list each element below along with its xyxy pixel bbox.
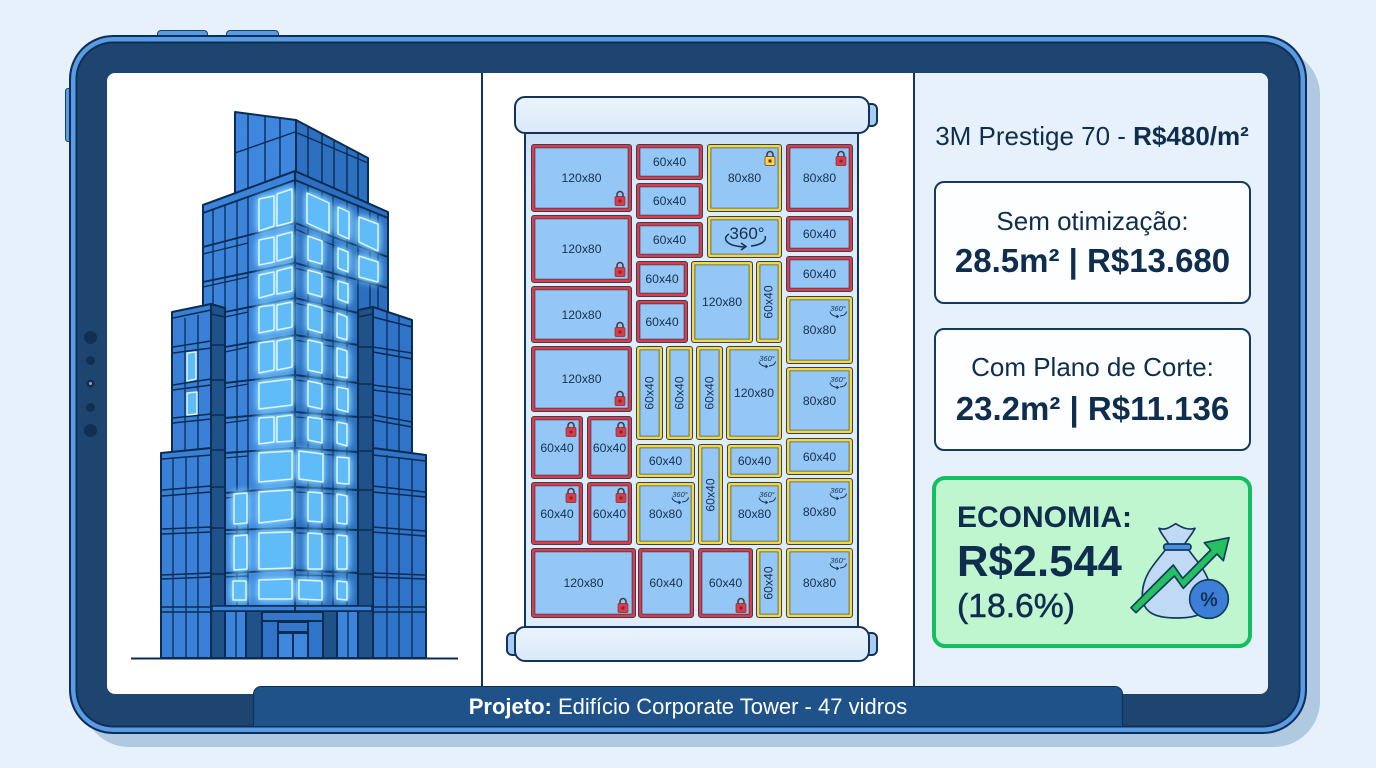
icon: lock (614, 262, 626, 277)
cell: 120x80 red (531, 215, 632, 283)
cell: vertical 60x40 yellow: 60x40 (762, 566, 776, 600)
cell: vertical 60x40 yellow: 60x40 (642, 376, 656, 410)
cell: 120x80 red: 120x80 (562, 242, 601, 256)
cell: vertical 60x40 yellow (756, 548, 782, 618)
cell: 60x40 yellow (786, 438, 853, 475)
cell: 60x40 red (636, 300, 688, 343)
cell: 60x40 red (636, 144, 703, 180)
cell: 60x40 red: 60x40 (653, 155, 686, 169)
bottom roller (514, 626, 870, 662)
icon: 360 small: 360° (672, 490, 688, 498)
icon: lock (614, 190, 626, 206)
icon: 360 small (758, 490, 776, 504)
icon: 360 rotation arrow: 360° (729, 224, 765, 243)
label: Com Plano de Corte: (971, 352, 1214, 382)
label: Sem otimização: (996, 206, 1189, 236)
cell: 80x80 yellow: 80x80 (803, 504, 836, 518)
cell: vertical 60x40 yellow (756, 261, 782, 343)
tablet side button (65, 88, 71, 142)
cell: 80x80 yellow (786, 548, 853, 618)
lit windows (233, 189, 378, 600)
cell: 120x80 red: 120x80 (562, 171, 601, 185)
card: without optimization (934, 181, 1251, 304)
cell: 60x40 red: 60x40 (593, 506, 626, 520)
icon: 360 small: 360° (830, 374, 846, 384)
left wing (161, 304, 225, 658)
cell: 120x80 red: 120x80 (564, 576, 603, 590)
cell: 120x80 red (531, 144, 632, 212)
project caption text: Projeto: Edifício Corporate Tower - 47 vidros (469, 694, 907, 719)
divider between building and plan (481, 73, 483, 694)
cell: 80x80 red: 80x80 (803, 171, 836, 185)
icon: 360 small (830, 486, 847, 500)
cell: 80x80 yellow (786, 367, 853, 434)
bottom roller right knob (866, 632, 878, 656)
cell: 80x80 yellow: 80x80 (728, 171, 761, 185)
cell: 120x80 yellow: 120x80 (734, 386, 774, 400)
cell: 60x40 red (636, 261, 688, 297)
icon: 360 small: 360° (830, 304, 846, 312)
cell: 120x80 red: 120x80 (562, 372, 601, 386)
cell: 60x40 yellow (727, 444, 782, 478)
cell: vertical 60x40 yellow (698, 444, 723, 545)
icon: lock (618, 598, 628, 613)
top roller (514, 96, 870, 134)
cell: 60x40 red (636, 183, 703, 219)
cell: 60x40 yellow: 60x40 (649, 454, 682, 468)
icon: 360 small: 360° (759, 490, 775, 498)
cell: 60x40 red (636, 222, 703, 258)
film price heading: 3M Prestige 70 - R$480/m² (935, 121, 1249, 151)
penthouse (235, 112, 368, 206)
cell: vertical 60x40 yellow (696, 346, 723, 440)
icon: 360 small (830, 304, 847, 318)
cell: 60x40 red (638, 548, 694, 618)
card: savings (932, 476, 1252, 648)
icon: 360 rotation arrow (724, 224, 766, 251)
cell: 60x40 red (698, 548, 753, 618)
building illustration (131, 111, 458, 660)
cell: 60x40 red: 60x40 (645, 272, 679, 286)
film sheet (524, 130, 859, 630)
cell: 60x40 red (786, 216, 853, 252)
project caption bar (253, 686, 1123, 726)
divider between plan and summary (913, 73, 915, 694)
icon: 360 small (830, 374, 847, 390)
icon: lock (614, 390, 626, 406)
cell: 60x40 red: 60x40 (649, 576, 683, 590)
cell: 120x80 yellow: 120x80 (702, 295, 742, 309)
cell: 360 degree rotation (707, 216, 782, 258)
bottom roller left knob (506, 632, 518, 656)
mid tower faces (203, 171, 388, 606)
cell: 60x40 red: 60x40 (593, 440, 626, 454)
cell: 80x80 yellow (707, 144, 782, 212)
icon: lock (616, 422, 626, 437)
cell: 60x40 red: 60x40 (540, 506, 574, 520)
right wing (358, 307, 426, 658)
panel: cutting plan (483, 73, 913, 694)
entrance and canopy (212, 606, 372, 658)
icon: 360 small (672, 490, 689, 504)
cell: 80x80 yellow: 80x80 (738, 506, 771, 520)
ground line (131, 658, 458, 660)
icon: 360 small (830, 556, 847, 570)
icon: lock (736, 598, 746, 613)
cell: 60x40 yellow: 60x40 (738, 454, 771, 468)
savings label: ECONOMIA: (957, 501, 1132, 534)
cell: 60x40 red (587, 482, 632, 545)
cell: vertical 60x40 yellow: 60x40 (762, 285, 776, 319)
cell: 60x40 red: 60x40 (540, 440, 574, 454)
value: 23.2m² | R$11.136 (956, 390, 1229, 427)
icon: 360 small: 360° (830, 556, 846, 564)
cell: 120x80 red (531, 548, 636, 618)
cell: 80x80 red (786, 144, 853, 212)
icon: 360 small: 360° (759, 354, 775, 362)
icon: lock (566, 488, 576, 503)
percent sign: % (1200, 590, 1218, 611)
cell: 60x40 yellow: 60x40 (803, 450, 836, 464)
cell: 60x40 red: 60x40 (803, 267, 836, 281)
tablet top button right (226, 30, 279, 38)
cell: vertical 60x40 yellow: 60x40 (672, 376, 686, 410)
cell: 80x80 yellow (636, 482, 695, 545)
film roll with cut plan (506, 96, 878, 662)
cell: 80x80 yellow: 80x80 (803, 323, 836, 337)
cell: 60x40 red (531, 482, 583, 545)
cell: 60x40 red: 60x40 (803, 227, 836, 241)
panel: cost summary (915, 73, 1268, 694)
cell: 60x40 red (786, 256, 853, 292)
cell: 80x80 yellow (727, 482, 782, 545)
cell: vertical 60x40 yellow (666, 346, 693, 440)
cell: 60x40 red: 60x40 (653, 194, 686, 208)
icon: 360 small (758, 354, 776, 368)
cell: 120x80 red (531, 346, 632, 412)
value: 28.5m² | R$13.680 (955, 242, 1230, 279)
cell: 80x80 yellow: 80x80 (803, 576, 836, 590)
cell: vertical 60x40 yellow: 60x40 (702, 376, 716, 410)
panel: building (107, 73, 482, 694)
cell: 60x40 red: 60x40 (653, 233, 686, 247)
icon: money bag with rising arrow (1130, 522, 1230, 620)
cell: 80x80 yellow (786, 478, 853, 545)
card: with cutting plan (934, 328, 1251, 451)
cell: 60x40 red (531, 416, 583, 479)
cell: vertical 60x40 yellow (636, 346, 663, 440)
front camera and sensors (84, 331, 97, 437)
savings value: R$2.544 (957, 538, 1122, 586)
cell: 60x40 red: 60x40 (645, 314, 679, 328)
cell: 80x80 yellow: 80x80 (649, 506, 682, 520)
cell: 80x80 yellow: 80x80 (803, 394, 836, 408)
cell: 120x80 yellow (691, 261, 753, 343)
top roller knob (866, 103, 878, 127)
cell: 60x40 red (587, 416, 632, 479)
cell: vertical 60x40 yellow: 60x40 (704, 478, 718, 511)
cell: 120x80 red (531, 286, 632, 343)
icon: lock (836, 150, 846, 166)
icon: lock (614, 322, 626, 337)
cell: 120x80 yellow (726, 346, 782, 440)
cell: 60x40 red: 60x40 (709, 576, 742, 590)
icon: lock (566, 422, 576, 437)
icon: lock (616, 488, 626, 503)
icon: yellow lock (764, 150, 776, 166)
savings percent: (18.6%) (957, 587, 1075, 625)
cell: 60x40 yellow (636, 444, 695, 478)
tablet top button left (157, 30, 208, 38)
icon: 360 small: 360° (830, 486, 846, 494)
cell: 80x80 yellow (786, 296, 853, 364)
cell: 120x80 red: 120x80 (562, 308, 601, 322)
